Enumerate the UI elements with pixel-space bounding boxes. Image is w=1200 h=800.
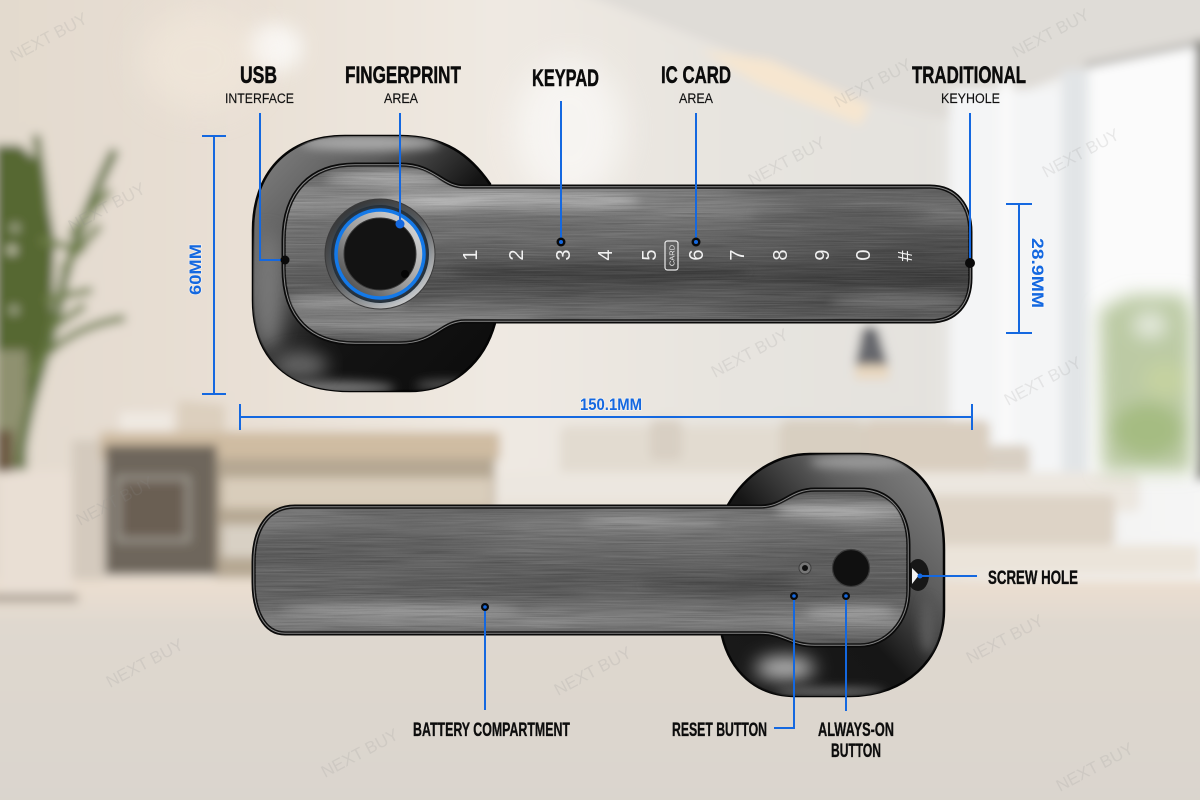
handle body: rear <box>250 485 915 650</box>
watermarks: NEXT BUY <box>73 473 157 530</box>
callout: keypad: KEYPAD <box>532 65 599 92</box>
watermarks: NEXT BUY <box>318 725 402 782</box>
card icon: CARD <box>668 244 676 266</box>
watermarks: NEXT BUY <box>745 133 829 190</box>
always-on button <box>832 550 870 586</box>
keypad digits: 3 <box>553 249 575 261</box>
callout: USB interface: USB <box>240 62 277 89</box>
front view of lock <box>252 135 975 395</box>
keypad digits: 1 <box>460 249 482 261</box>
callout: USB interface <box>225 62 294 264</box>
callout: traditional keyhole: TRADITIONAL <box>912 62 1026 89</box>
callout: always-on button <box>818 592 894 762</box>
watermarks: NEXT BUY <box>963 611 1047 668</box>
keypad digits: 5 <box>639 249 661 261</box>
callout: IC card area: IC CARD <box>661 62 731 89</box>
callout: keypad <box>532 65 599 246</box>
callout: IC card area <box>661 62 731 246</box>
callout: screw hole <box>918 568 1078 589</box>
dimension: 28.9MM thickness: 28.9MM <box>1028 238 1047 308</box>
watermarks: NEXT BUY <box>831 55 915 112</box>
keypad digits: 0 <box>853 249 875 261</box>
callout: screw hole: SCREW HOLE <box>988 568 1078 589</box>
dimension: 150.1MM width: 150.1MM <box>580 395 642 414</box>
keypad digits: 8 <box>770 249 792 261</box>
callout: battery compartment <box>413 603 570 741</box>
dimension: 60MM height: 60MM <box>186 244 205 295</box>
watermarks: NEXT BUY <box>65 179 149 236</box>
keypad digits: 4 <box>595 249 617 261</box>
callout: battery compartment: BATTERY COMPARTMENT <box>413 720 570 741</box>
callout: USB interface: INTERFACE <box>225 91 294 106</box>
watermarks: NEXT BUY <box>708 325 792 382</box>
rear view of lock <box>250 454 944 696</box>
dimension: 28.9MM thickness <box>1006 204 1047 333</box>
blurred garden foliage through window <box>1100 295 1192 472</box>
callout: fingerprint area: FINGERPRINT <box>345 62 461 89</box>
keypad digits: 2 <box>506 249 528 261</box>
callout: reset button: RESET BUTTON <box>672 720 767 741</box>
fingerprint sensor with blue ring <box>325 199 435 309</box>
keypad digits: 6 <box>686 249 708 261</box>
dimension: 60MM height <box>186 136 226 394</box>
dimension: 150.1MM width <box>240 395 972 430</box>
handle body: front <box>280 160 975 350</box>
reset pinhole <box>799 562 811 574</box>
callout: always-on button: ALWAYS-ON <box>818 720 894 741</box>
keypad digits <box>460 249 917 262</box>
callout: always-on button: BUTTON <box>831 741 881 762</box>
watermarks: NEXT BUY <box>1039 125 1123 182</box>
keypad digits: # <box>895 250 917 262</box>
watermarks: NEXT BUY <box>7 9 91 66</box>
rose plate: rear <box>722 454 944 696</box>
watermarks: NEXT BUY <box>1053 739 1137 796</box>
callout: fingerprint area <box>345 62 461 228</box>
watermarks: NEXT BUY <box>1001 353 1085 410</box>
callout: traditional keyhole: KEYHOLE <box>941 91 1000 106</box>
keypad digits: 7 <box>727 249 749 261</box>
callout: IC card area: AREA <box>679 91 713 106</box>
card icon <box>665 241 678 270</box>
callout: reset button <box>672 592 798 741</box>
callout: fingerprint area: AREA <box>384 91 418 106</box>
keypad digits: 9 <box>812 249 834 261</box>
callout: traditional keyhole <box>912 62 1026 268</box>
watermarks: NEXT BUY <box>551 643 635 700</box>
rose plate: front <box>252 135 495 395</box>
watermarks: NEXT BUY <box>1009 5 1093 62</box>
screw hole recess <box>907 559 929 591</box>
watermarks: NEXT BUY <box>103 635 187 692</box>
